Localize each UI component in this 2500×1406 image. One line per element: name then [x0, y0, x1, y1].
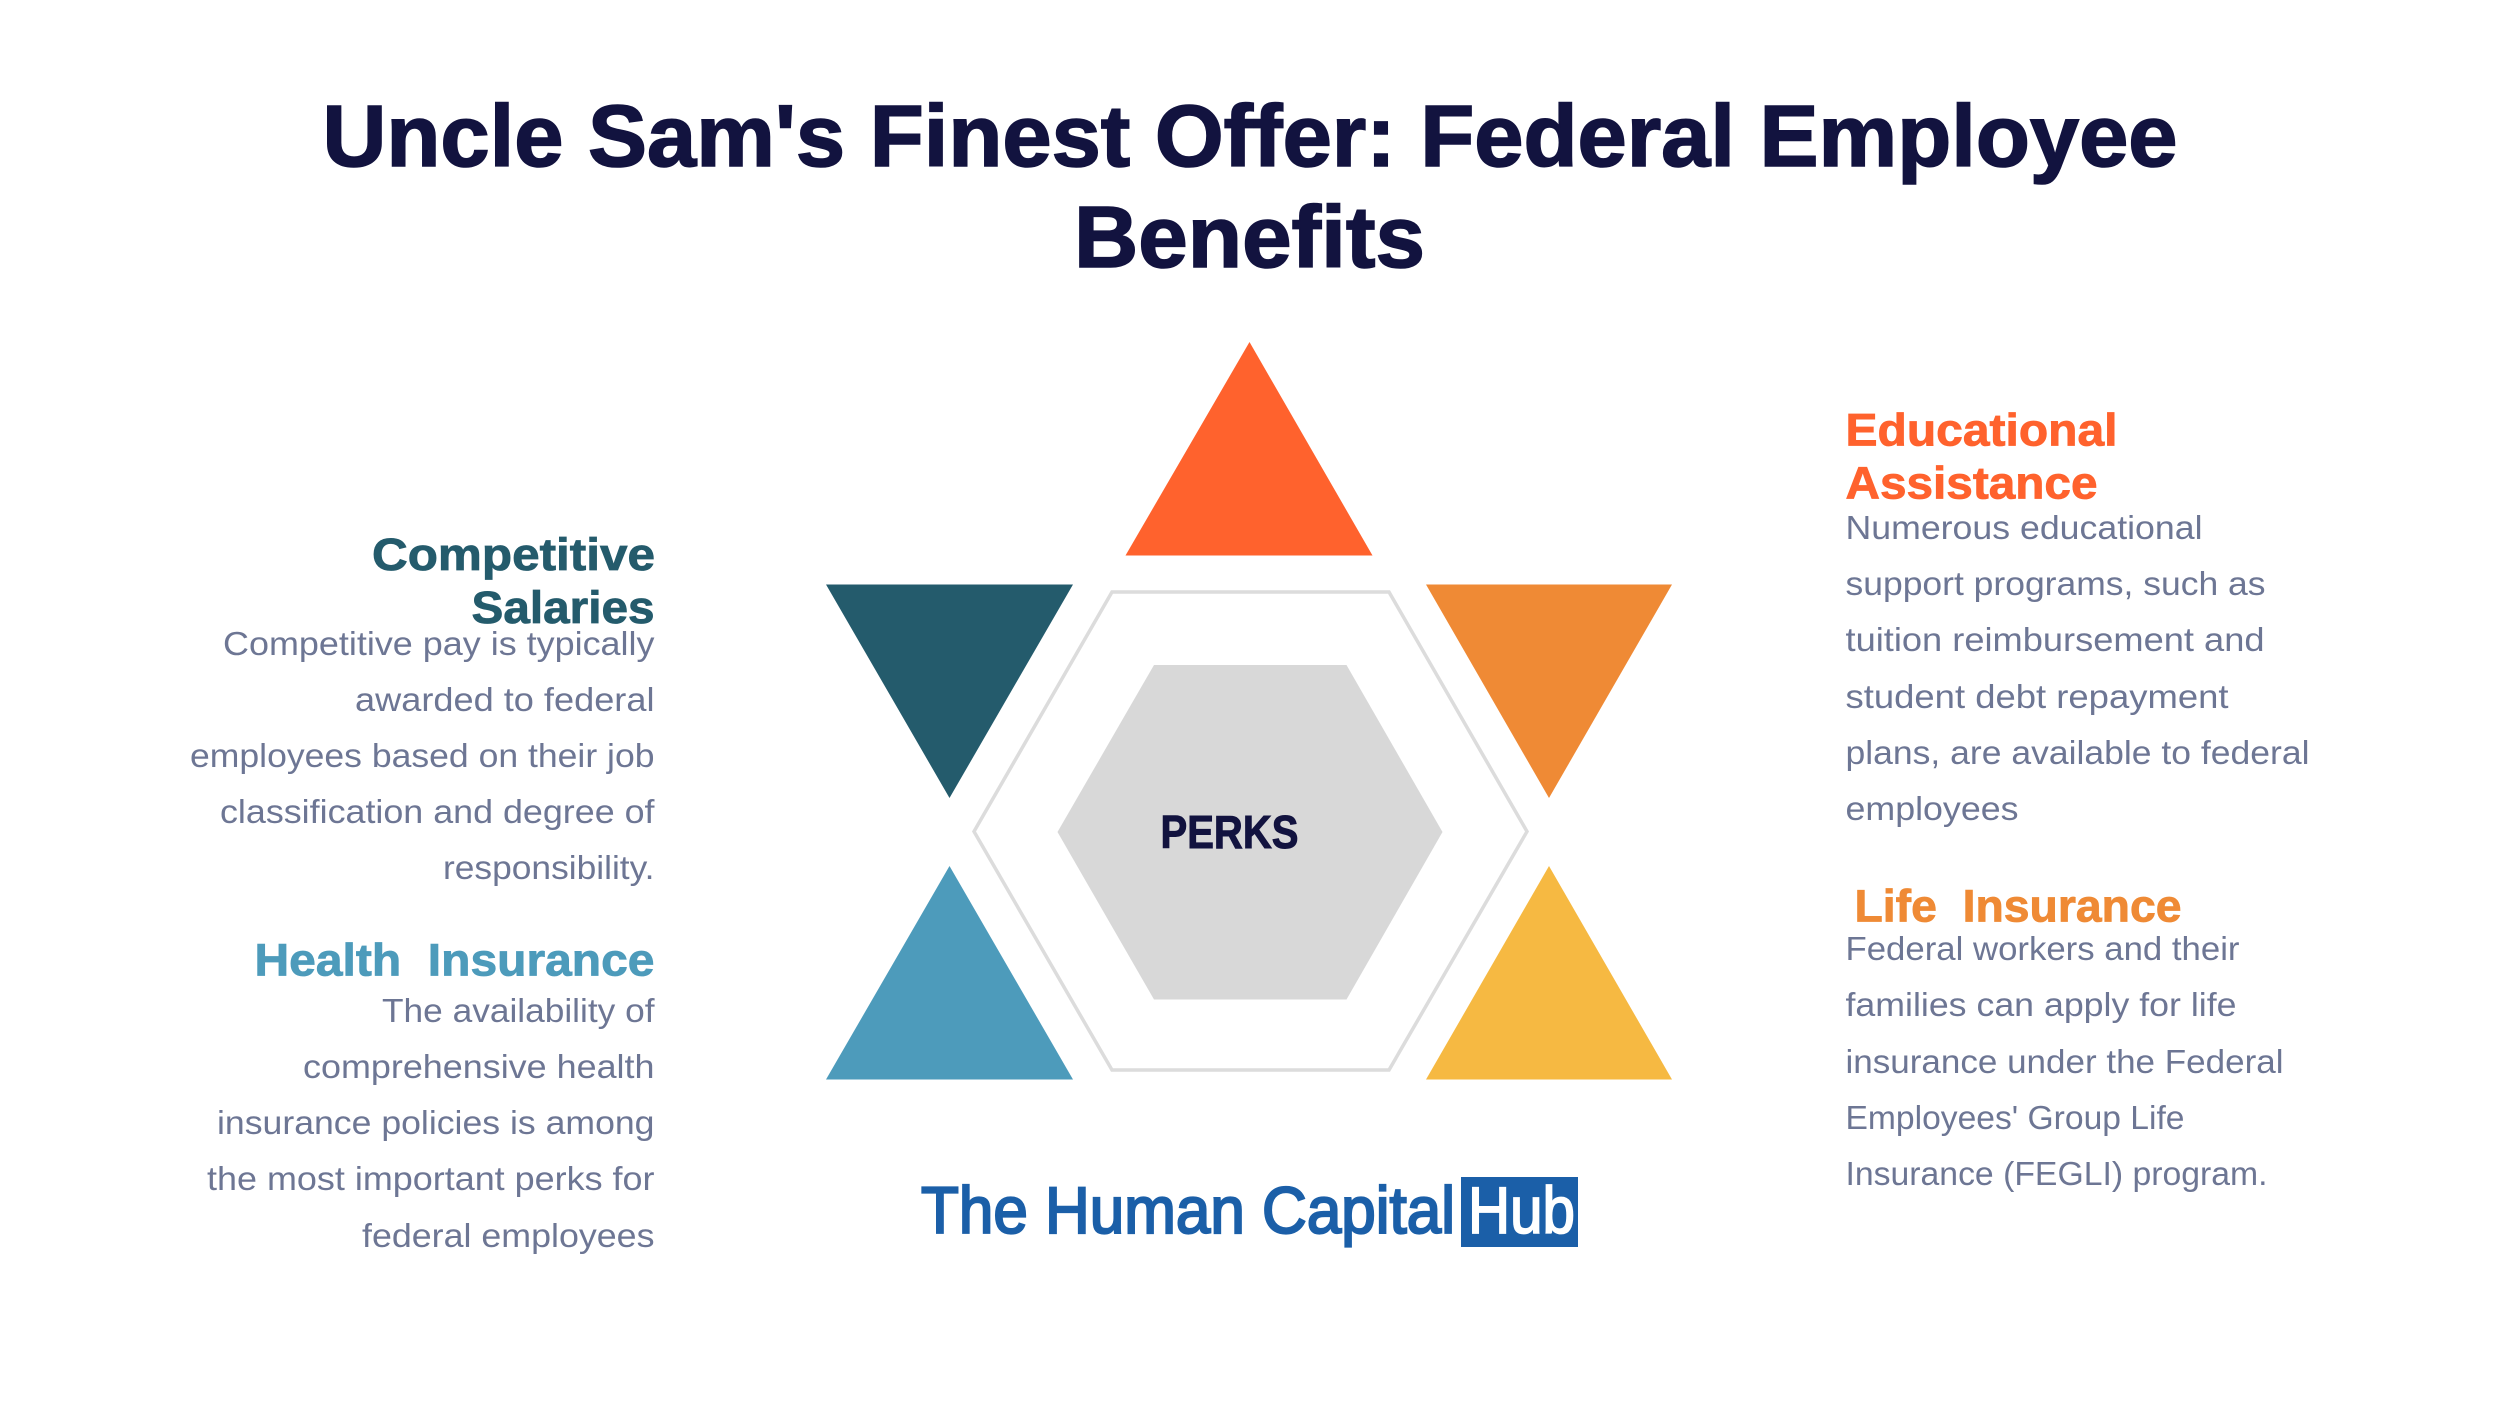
- heading: competitive salaries: Salaries: [472, 582, 654, 633]
- heading: competitive salaries: Competitive: [372, 529, 655, 580]
- text: health insurance description: federal employees: [362, 1218, 654, 1255]
- text: educational assistance description: tuition reimbursement and: [1846, 622, 2264, 659]
- panel: health insurance: [207, 934, 655, 1255]
- heading: educational assistance: [1846, 404, 2118, 508]
- text: educational assistance description: support programs, such as: [1846, 566, 2266, 603]
- triangle: yellow: [1426, 866, 1672, 1080]
- text: competitive salaries description: awarded to federal: [355, 682, 654, 719]
- text: life insurance description: families can apply for life: [1846, 987, 2236, 1024]
- text: health insurance description: insurance policies is among: [217, 1105, 654, 1142]
- heading: competitive salaries: [372, 529, 655, 633]
- text: competitive salaries description: employees based on their job: [190, 738, 654, 775]
- text: educational assistance description: plans, are available to federal: [1846, 735, 2310, 772]
- text: life insurance description: Insurance (FEGLI) program.: [1846, 1156, 2268, 1193]
- text: competitive salaries description: classification and degree of: [220, 794, 655, 831]
- text: health insurance description: [207, 993, 655, 1255]
- text: life insurance description: Employees' Group Life: [1846, 1100, 2184, 1137]
- triangle: health insurance: [826, 866, 1073, 1080]
- text: educational assistance description: student debt repayment: [1846, 679, 2229, 716]
- hexagon outline: [974, 592, 1527, 1070]
- heading: educational assistance: Educational: [1846, 404, 2118, 456]
- text: health insurance description: The availability of: [382, 993, 655, 1030]
- text: life insurance description: insurance under the Federal: [1846, 1044, 2284, 1081]
- text: educational assistance description: employees: [1846, 791, 2018, 828]
- text: educational assistance description: Numerous educational: [1846, 510, 2202, 547]
- triangle: life insurance: [1426, 584, 1672, 798]
- text: life insurance description: Federal workers and their: [1846, 931, 2240, 968]
- heading: educational assistance: Assistance: [1846, 458, 2098, 508]
- text: health insurance description: comprehensive health: [303, 1049, 654, 1086]
- text: competitive salaries description: responsibility.: [443, 850, 654, 887]
- panel: competitive salaries: [190, 529, 655, 887]
- hexagon: center: [1058, 665, 1442, 1000]
- logo: The Human Capital Hub: Hub: [1468, 1173, 1575, 1247]
- title: [322, 88, 2178, 286]
- logo: The Human Capital Hub: The Human Capital: [921, 1173, 1455, 1247]
- diagram: perks hexagon with triangles: [826, 342, 1672, 1080]
- text: educational assistance description: [1846, 510, 2310, 828]
- text: life insurance description: [1846, 931, 2284, 1193]
- text: competitive salaries description: Competitive pay is typically: [223, 626, 655, 663]
- panel: educational assistance: [1846, 404, 2310, 828]
- heading: health insurance: Health Insurance: [254, 934, 654, 986]
- text: competitive salaries description: [190, 626, 655, 887]
- triangle: competitive salaries: [826, 584, 1073, 798]
- title: Benefits: [1074, 189, 1425, 286]
- center label: perks: PERKS: [1160, 806, 1298, 858]
- panel: life insurance: [1846, 880, 2284, 1193]
- text: health insurance description: the most important perks for: [207, 1161, 654, 1198]
- triangle: educational assistance: [1126, 342, 1372, 556]
- title: Uncle Sam's Finest Offer: Federal Employee: [322, 88, 2178, 185]
- heading: life insurance: Life Insurance: [1854, 880, 2182, 932]
